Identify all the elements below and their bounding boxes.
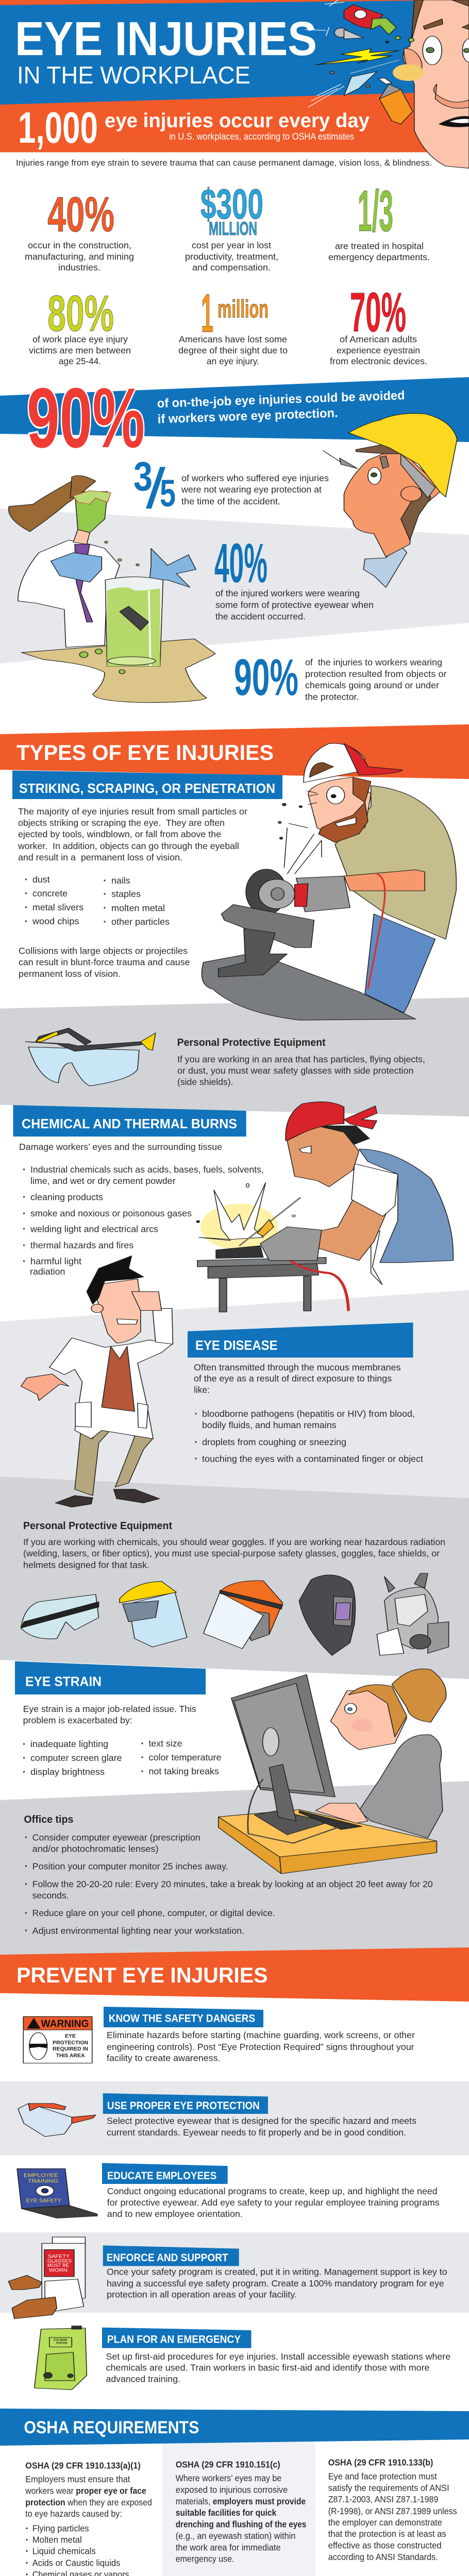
illustration: worker with angle grinder (202, 743, 456, 1020)
panel: personal protective equipment, safety glasses: Personal Protective Equipment (177, 1037, 326, 1048)
panel: osha 1910.133(a)(1): Flying particles (32, 2523, 89, 2534)
text: striking description: objects striking or scraping the eye. They are often (18, 818, 225, 828)
icon: training laptop: EYE SAFETY (26, 2198, 61, 2204)
panel: osha 1910.133(b): (R-1998), or ANSI Z87.1989 unless (328, 2506, 457, 2516)
panel: use proper eye protection: current standards. Eyewear needs to fit properly and be in good condition. (107, 2127, 406, 2138)
text: chemical burns list: smoke and noxious or poisonous gases (30, 1208, 192, 1218)
panel: plan for an emergency: PLAN FOR AN EMERGENCY (107, 2333, 241, 2345)
list: particle types: nails (111, 875, 130, 886)
list: particle types: metal slivers (32, 902, 83, 912)
stat: $300 million: $300 (200, 181, 263, 228)
text: collisions: can result in blunt-force trauma and cause (19, 957, 190, 968)
panel: osha 1910.133(b): OSHA (29 CFR 1910.133(b) (328, 2457, 433, 2467)
stat: 70%: from electronic devices. (330, 356, 427, 366)
stat: 90% around protector (234, 649, 447, 706)
text: office tips: and/or photochromatic lenses) (32, 1844, 159, 1854)
icon: goggles (21, 1595, 99, 1639)
stat: 3/5 not wearing protection: / (146, 457, 166, 520)
text: chemical burns list: cleaning products (30, 1192, 103, 1202)
stat: $300 million: cost per year in lost (192, 240, 271, 250)
stat: 40% wearing eyewear: 40% (214, 532, 267, 594)
subheading: eye disease (188, 1323, 413, 1358)
text: eye strain causes: not taking breaks (148, 1766, 219, 1776)
panel: osha 1910.151(c): suitable facilities for quick (176, 2507, 277, 2518)
heading: prevent eye injuries: PREVENT EYE INJURIES (16, 1963, 268, 1987)
panel: osha 1910.133(a)(1): protection when they are exposed (25, 2497, 152, 2507)
illustration: man rubbing sore eye (21, 1256, 173, 1507)
icon: safety glasses dispenser: MUST BE (47, 2263, 69, 2268)
panel: know the safety dangers (23, 2007, 415, 2063)
icon: warning sign: WARNING (41, 2019, 89, 2030)
panel: know the safety dangers: Eliminate hazards before starting (machine guarding, work screens, or other (107, 2030, 415, 2040)
stat: 80% (29, 285, 131, 366)
stat: 3/5 not wearing protection: of workers who suffered eye injuries (181, 473, 329, 483)
icon: eyewash station (35, 2326, 87, 2389)
panel: plan for an emergency: Set up first-aid procedures for eye injuries. Install accessible eyewash stations where (106, 2351, 450, 2362)
stat: 90% around protector: chemicals going around or under (305, 680, 439, 690)
text: eye disease list: touching the eyes with a contaminated finger or object (202, 1454, 423, 1464)
panel: know the safety dangers: KNOW THE SAFETY DANGERS (109, 2012, 255, 2025)
stat: 40% wearing eyewear (214, 532, 374, 621)
list: particle types: wood chips (32, 916, 79, 926)
stat: 1 million: degree of their sight due to (178, 345, 288, 355)
panel: osha 1910.133(a)(1): Employers must ensure that (25, 2474, 130, 2484)
text: eye strain causes: Eye strain is a major job-related issue. This (23, 1704, 196, 1714)
stat: 1/3 (328, 179, 430, 262)
panel: educate employees (17, 2163, 440, 2219)
panel: enforce and support (8, 2237, 447, 2318)
panel: personal protective equipment, safety glasses: (side shields). (177, 1077, 233, 1087)
text: striking description (18, 806, 247, 862)
icon: yellow face shield (120, 1581, 187, 1647)
stat: $300 million: productivity, treatment, (185, 251, 278, 262)
icon: safety glasses dispenser: WORN (49, 2268, 68, 2273)
intro text: Injuries range from eye strain to severe trauma that can cause permanent damage, vision loss, & blindness. (16, 158, 432, 168)
panel: osha 1910.133(a)(1) (25, 2460, 152, 2576)
panel: osha 1910.151(c): materials, employers must provide (176, 2496, 306, 2506)
stat: 1 million: 1 (201, 283, 213, 344)
list: particle types: staples (111, 889, 141, 899)
text: striking description: The majority of eye injuries result from small particles or (18, 806, 247, 817)
illustration: welder (196, 1102, 453, 1312)
stat: 1 million: Americans have lost some (179, 334, 287, 344)
panel: osha 1910.133(a)(1): to eye hazards caused by: (25, 2509, 122, 2519)
stat: 3/5 not wearing protection: 5 (160, 472, 176, 515)
illustration: lab worker splashed with chemicals (9, 476, 215, 703)
panel: know the safety dangers: facility to create awareness. (107, 2053, 221, 2063)
text: striking description: worker. In addition, objects can go through the eyeball (18, 841, 239, 851)
stat: 80%: age 25-44. (59, 356, 101, 366)
panel: osha 1910.133(a)(1): Molten metal (32, 2535, 82, 2545)
icon: training laptop (17, 2168, 97, 2218)
subheading: chemical and thermal burns: CHEMICAL AND THERMAL BURNS (22, 1116, 237, 1131)
headline stat: 1,000 eye injuries: 1,000 (18, 104, 98, 152)
icons: protective equipment row (21, 1573, 449, 1655)
subheading: striking, scraping, or penetration (12, 771, 282, 799)
callout: 90% avoidable: of on-the-job eye injuries could be avoided (157, 388, 405, 411)
text: chemical burns list: thermal hazards and fires (30, 1240, 133, 1250)
panel: enforce and support: Once your safety program is created, put it in writing. Management support is key to (107, 2267, 447, 2277)
stat: 70% (330, 281, 427, 366)
panel: know the safety dangers: engineering controls). Post “Eye Protection Required” signs throughout your (107, 2042, 414, 2052)
panel: use proper eye protection: USE PROPER EYE PROTECTION (107, 2100, 260, 2112)
stat: 80%: victims are men between (29, 345, 131, 355)
heading: osha requirements: OSHA REQUIREMENTS (24, 2418, 199, 2437)
panel: osha 1910.133(b): according to ANSI Standards. (328, 2552, 438, 2562)
stat: 70%: of American adults (340, 334, 417, 344)
text: chemical burns list: welding light and electrical arcs (30, 1224, 158, 1234)
panel: personal protective equipment, safety glasses (25, 1028, 425, 1087)
panel: osha 1910.133(a)(1): Liquid chemicals (32, 2546, 96, 2556)
illustration: debris flying at startled face (305, 0, 469, 168)
icon: training laptop: TRAINING (28, 2179, 58, 2184)
stat: 90% around protector: 90% (234, 649, 298, 706)
text: striking description: ejected by tools, windblown, or fall from above the (18, 829, 221, 839)
title: IN THE WORKPLACE (17, 61, 250, 89)
text: chemical burns list: lime, and wet or dry cement powder (30, 1176, 176, 1186)
text: personal protective equipment, chemicals: If you are working with chemicals, you should wear goggles. If you are working near hazardous radiation (23, 1537, 445, 1547)
panel: educate employees: for protective eyewear. Add eye safety to your regular employee training programs (107, 2197, 440, 2208)
text: office tips: Office tips (24, 1814, 73, 1825)
panel: osha 1910.133(a)(1): Acids or Caustic liquids (32, 2557, 121, 2568)
panel: osha 1910.151(c): Where workers’ eyes may be (176, 2473, 281, 2483)
illustration: woman straining at computer (219, 1669, 446, 1874)
stat: 40%: industries. (58, 262, 100, 273)
icon: safety glasses dispenser (8, 2237, 85, 2318)
stat: 1 million: an eye injury. (207, 356, 259, 366)
text: eye strain causes: computer screen glare (30, 1753, 122, 1763)
panel: osha 1910.133(b): satisfy the requirements of ANSI (328, 2483, 449, 2493)
panel: osha 1910.133(b): Eye and face protection must (328, 2471, 437, 2482)
icon: warning sign: THIS AREA (56, 2053, 85, 2059)
panel: osha 1910.133(a)(1): workers wear proper eye or face (25, 2485, 146, 2496)
list: particle types: dust (32, 874, 50, 885)
title (15, 12, 317, 89)
text: personal protective equipment, chemicals: Personal Protective Equipment (23, 1520, 172, 1532)
text: chemical burns list: Industrial chemicals such as acids, bases, fuels, solvents, (30, 1164, 264, 1175)
subheading: striking, scraping, or penetration: STRIKING, SCRAPING, OR PENETRATION (19, 781, 275, 796)
text: office tips: Consider computer eyewear (prescription (32, 1833, 200, 1843)
text: personal protective equipment, chemicals: helmets designed for that task. (23, 1560, 149, 1570)
stat: 90% around protector: protection resulted from objects or (305, 669, 447, 679)
panel: plan for an emergency: chemicals are used. Train workers in basic first-aid and identify those with more (106, 2363, 430, 2373)
text: chemical burns list: harmful light (30, 1256, 81, 1266)
stat: 70%: 70% (350, 281, 406, 343)
text: office tips: Reduce glare on your cell phone, computer, or digital device. (32, 1908, 275, 1918)
callout: 90% avoidable: 90% (27, 370, 145, 465)
subheading: eye disease: EYE DISEASE (195, 1337, 278, 1353)
illustration: worker in hard hat (323, 413, 457, 587)
stat: 90% around protector: the protector. (305, 691, 359, 702)
panel: personal protective equipment, safety glasses: If you are working in an area that has particles, flying objects, (177, 1054, 425, 1064)
stat: $300 million: and compensation. (192, 262, 271, 273)
stat: $300 million (185, 181, 278, 273)
subheading: eye strain (15, 1661, 206, 1694)
text: office tips: Position your computer monitor 25 inches away. (32, 1861, 228, 1872)
text: eye disease list: bloodborne pathogens (hepatitis or HIV) from blood, (202, 1409, 415, 1419)
icon: safety glasses (25, 1028, 156, 1086)
stat: 1/3: 1/3 (358, 179, 393, 243)
callout: 90% avoidable: if workers wore eye protection. (157, 406, 338, 426)
panel: enforce and support: ENFORCE AND SUPPORT (107, 2252, 228, 2264)
text: eye disease list: of the eye as a result of direct exposure to things (194, 1374, 392, 1384)
headline stat: 1,000 eye injuries (18, 104, 370, 152)
list: particle types: other particles (111, 917, 170, 927)
panel: osha 1910.151(c) (176, 2459, 307, 2564)
text: eye strain causes: text size (148, 1738, 182, 1749)
stat: 40%: 40% (47, 187, 114, 242)
panel: osha 1910.133(b) (328, 2457, 457, 2562)
panel: plan for an emergency: advanced training. (106, 2374, 180, 2384)
panel: osha 1910.151(c): emergency use. (176, 2554, 234, 2564)
panel: osha 1910.151(c): the work area for immediate (176, 2543, 281, 2553)
list: particle types (25, 874, 170, 927)
icon: warning sign: PROTECTION (53, 2040, 88, 2046)
icon: training laptop: EMPLOYEE (24, 2173, 58, 2179)
panel: osha 1910.133(b): that the protection is at least as (328, 2529, 446, 2539)
stat: 3/5 not wearing protection: the time of the accident. (181, 496, 280, 506)
text: chemical burns list: Damage workers’ eyes and the surrounding tissue (19, 1142, 222, 1152)
list: particle types: concrete (32, 888, 68, 899)
text: office tips: Adjust environmental lighting near your workstation. (32, 1926, 244, 1936)
text: eye strain causes: display brightness (30, 1767, 105, 1777)
panel: plan for an emergency (35, 2326, 450, 2389)
text: collisions: Collisions with large objects or projectiles (19, 946, 188, 956)
panel: osha 1910.151(c): drenching and flushing of the eyes (176, 2519, 307, 2530)
subheading: eye strain: EYE STRAIN (25, 1674, 102, 1689)
text: eye disease list: droplets from coughing or sneezing (202, 1437, 346, 1447)
title: EYE INJURIES (15, 12, 317, 65)
icon: safety glasses dispenser: SAFETY (48, 2254, 70, 2260)
text: office tips: seconds. (32, 1890, 69, 1901)
stat: 3/5 not wearing protection: 3 (133, 453, 153, 499)
icon: safety glasses dispenser: GLASSES (47, 2259, 72, 2264)
panel: educate employees: and to new employee orientation. (107, 2209, 243, 2219)
panel: osha 1910.151(c): OSHA (29 CFR 1910.151(c) (176, 2459, 280, 2469)
stat: 40% (25, 187, 134, 273)
callout: 90% avoidable (27, 370, 405, 465)
icon: welding helmet (299, 1575, 355, 1655)
text: striking description: and result in a permanent loss of vision. (18, 852, 182, 862)
text: chemical burns list: radiation (30, 1266, 65, 1277)
stat: 70%: experience eyestrain (337, 345, 420, 355)
panel: osha 1910.151(c): exposed to injurious corrosive (176, 2484, 288, 2495)
icon: warning sign (23, 2016, 92, 2063)
stat: 1 million: million (217, 296, 269, 323)
icon: eyewash station: STATION (56, 2342, 68, 2345)
icon: wraparound safety glasses (18, 2104, 96, 2137)
text: eye disease list (194, 1362, 423, 1464)
text: personal protective equipment, chemicals (23, 1520, 445, 1570)
text: eye strain causes: color temperature (148, 1752, 222, 1762)
headline stat: 1,000 eye injuries: eye injuries occur every day (105, 110, 370, 132)
icon: eyewash station: EYE WASH (54, 2339, 68, 2342)
text: eye disease list: Often transmitted through the mucous membranes (194, 1362, 401, 1372)
stat: 40%: occur in the construction, (28, 240, 131, 250)
stat: 40% wearing eyewear: of the injured workers were wearing (215, 588, 360, 599)
panel: osha 1910.133(b): effective as those constructed (328, 2540, 442, 2550)
panel: enforce and support: having a successful eye safety program. Create a 100% mandatory program for eye (107, 2278, 444, 2289)
icon: full-face respirator (377, 1573, 449, 1655)
panel: enforce and support: protection in all operation areas of your facility. (107, 2290, 297, 2300)
stat: 40% wearing eyewear: the accident occurred. (215, 611, 306, 621)
headline stat: 1,000 eye injuries: in U.S. workplaces, according to OSHA estimates (169, 131, 354, 142)
stat: 40% wearing eyewear: some form of protective eyewear when (215, 600, 374, 610)
stat: $300 million: MILLION (209, 218, 257, 239)
text: office tips: Follow the 20-20-20 rule: Every 20 minutes, take a break by looking at an object 20 feet away for 20 (32, 1879, 433, 1889)
stat: 3/5 not wearing protection: were not wearing eye protection at (181, 484, 322, 495)
panel: osha 1910.133(b): Z87.1-2003, ANSI Z87.1-1989 (328, 2494, 438, 2504)
text: eye disease list: like: (194, 1385, 210, 1395)
stat: 1/3: are treated in hospital (335, 241, 424, 251)
text: personal protective equipment, chemicals: (welding, lasers, or fiber optics), you must use special-purpose safety glasses, goggles, face shields, or (23, 1548, 440, 1558)
text: office tips (24, 1814, 433, 1936)
text: collisions (19, 946, 190, 979)
panel: osha 1910.133(b): the employer can demonstrate (328, 2517, 442, 2528)
panel: use proper eye protection: Select protective eyewear that is designed for the specific hazard and meets (107, 2115, 416, 2126)
list: particle types: molten metal (111, 903, 165, 913)
text: collisions: permanent loss of vision. (19, 969, 121, 979)
icon: orange face shield (204, 1581, 282, 1649)
panel: educate employees: EDUCATE EMPLOYEES (107, 2170, 216, 2182)
panel: educate employees: Conduct ongoing educational programs to create, keep up, and highlight the need (107, 2186, 438, 2196)
text: eye strain causes: problem is exacerbated by: (23, 1715, 132, 1725)
stat: 3/5 not wearing protection (133, 453, 329, 520)
stat: 1/3: emergency departments. (328, 252, 430, 262)
panel: personal protective equipment, safety glasses: or dust, you must wear safety glasses with side protection (177, 1065, 413, 1076)
text: eye strain causes (23, 1704, 221, 1777)
stat: 80%: of work place eye injury (32, 334, 128, 344)
stat: 1 million (178, 283, 288, 366)
panel: osha 1910.151(c): (e.g., an eyewash station) within (176, 2531, 295, 2541)
panel: use proper eye protection (18, 2093, 416, 2138)
icon: warning sign: REQUIRED IN (53, 2046, 88, 2052)
text: chemical burns list (19, 1142, 264, 1277)
panel: osha 1910.133(a)(1): OSHA (29 CFR 1910.133(a)(1) (25, 2460, 141, 2470)
text: eye disease list: bodily fluids, and human remains (202, 1420, 337, 1430)
stat: 40%: manufacturing, and mining (25, 251, 134, 262)
stat: 80%: 80% (47, 285, 114, 342)
heading: types of eye injuries: TYPES OF EYE INJURIES (16, 740, 274, 765)
icon: warning sign: EYE (65, 2033, 76, 2039)
text: eye strain causes: inadequate lighting (30, 1739, 108, 1749)
subheading: chemical and thermal burns (13, 1105, 246, 1137)
stat: 90% around protector: of the injuries to workers wearing (305, 657, 442, 667)
